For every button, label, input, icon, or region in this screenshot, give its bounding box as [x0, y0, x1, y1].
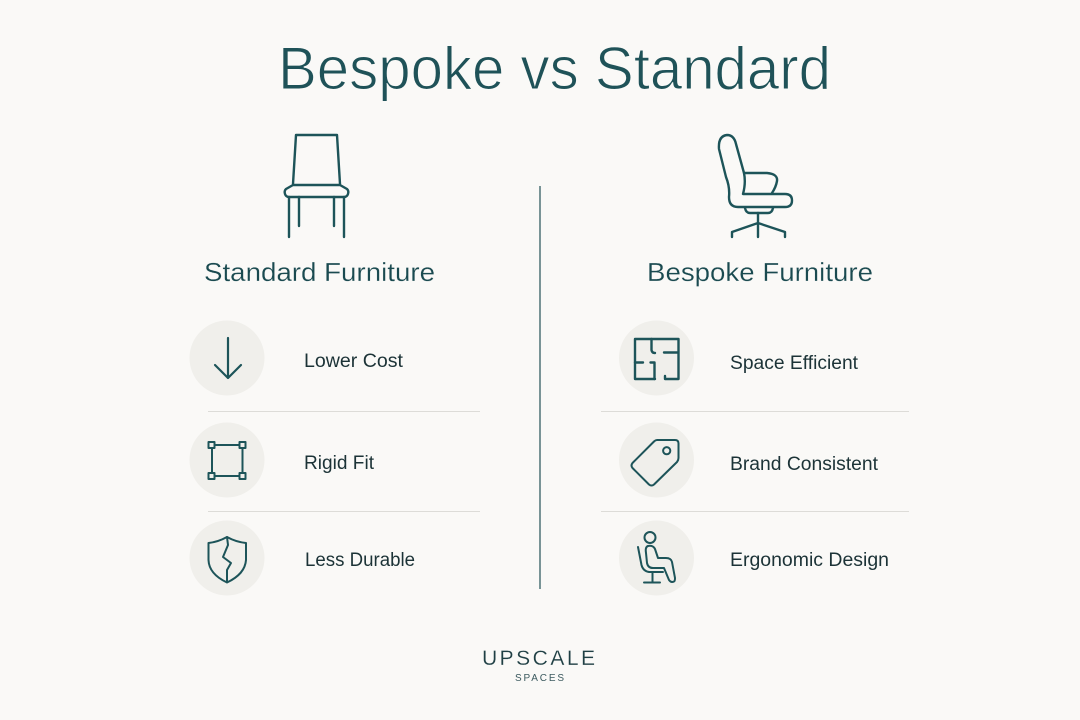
icon: down arrow: [215, 338, 241, 378]
item: less durable: [190, 520, 415, 596]
logo: SPACES: [515, 673, 564, 684]
icon: dining chair: [285, 135, 348, 237]
item: space efficient: [619, 320, 859, 396]
label: lower cost: Lower Cost: [304, 351, 404, 372]
logo: [482, 647, 595, 684]
icon: office chair: [719, 135, 792, 237]
icon: cracked shield: [208, 537, 246, 582]
item: brand consistent: [619, 422, 879, 498]
label: brand consistent: Brand Consistent: [730, 454, 879, 475]
panel: standard furniture: [190, 135, 480, 596]
label: less durable: Less Durable: [305, 550, 415, 571]
icon: bounding square: [208, 442, 246, 479]
label: ergonomic design: Ergonomic Design: [730, 550, 889, 571]
logo: UPSCALE: [482, 647, 595, 670]
item: ergonomic design: [619, 520, 889, 596]
center divider: [539, 186, 541, 589]
icon: seated person: [638, 532, 675, 582]
heading: standard furniture: Standard Furniture: [204, 257, 435, 287]
item: rigid fit: [190, 422, 375, 498]
panel: bespoke furniture: [601, 135, 909, 596]
icon: floor plan: [635, 339, 678, 379]
item: lower cost: [190, 320, 404, 396]
icon: price tag: [632, 440, 678, 486]
label: rigid fit: Rigid Fit: [304, 453, 375, 474]
heading: bespoke furniture: Bespoke Furniture: [647, 257, 873, 287]
title: Bespoke vs Standard: [278, 35, 831, 102]
label: space efficient: Space Efficient: [730, 353, 859, 374]
